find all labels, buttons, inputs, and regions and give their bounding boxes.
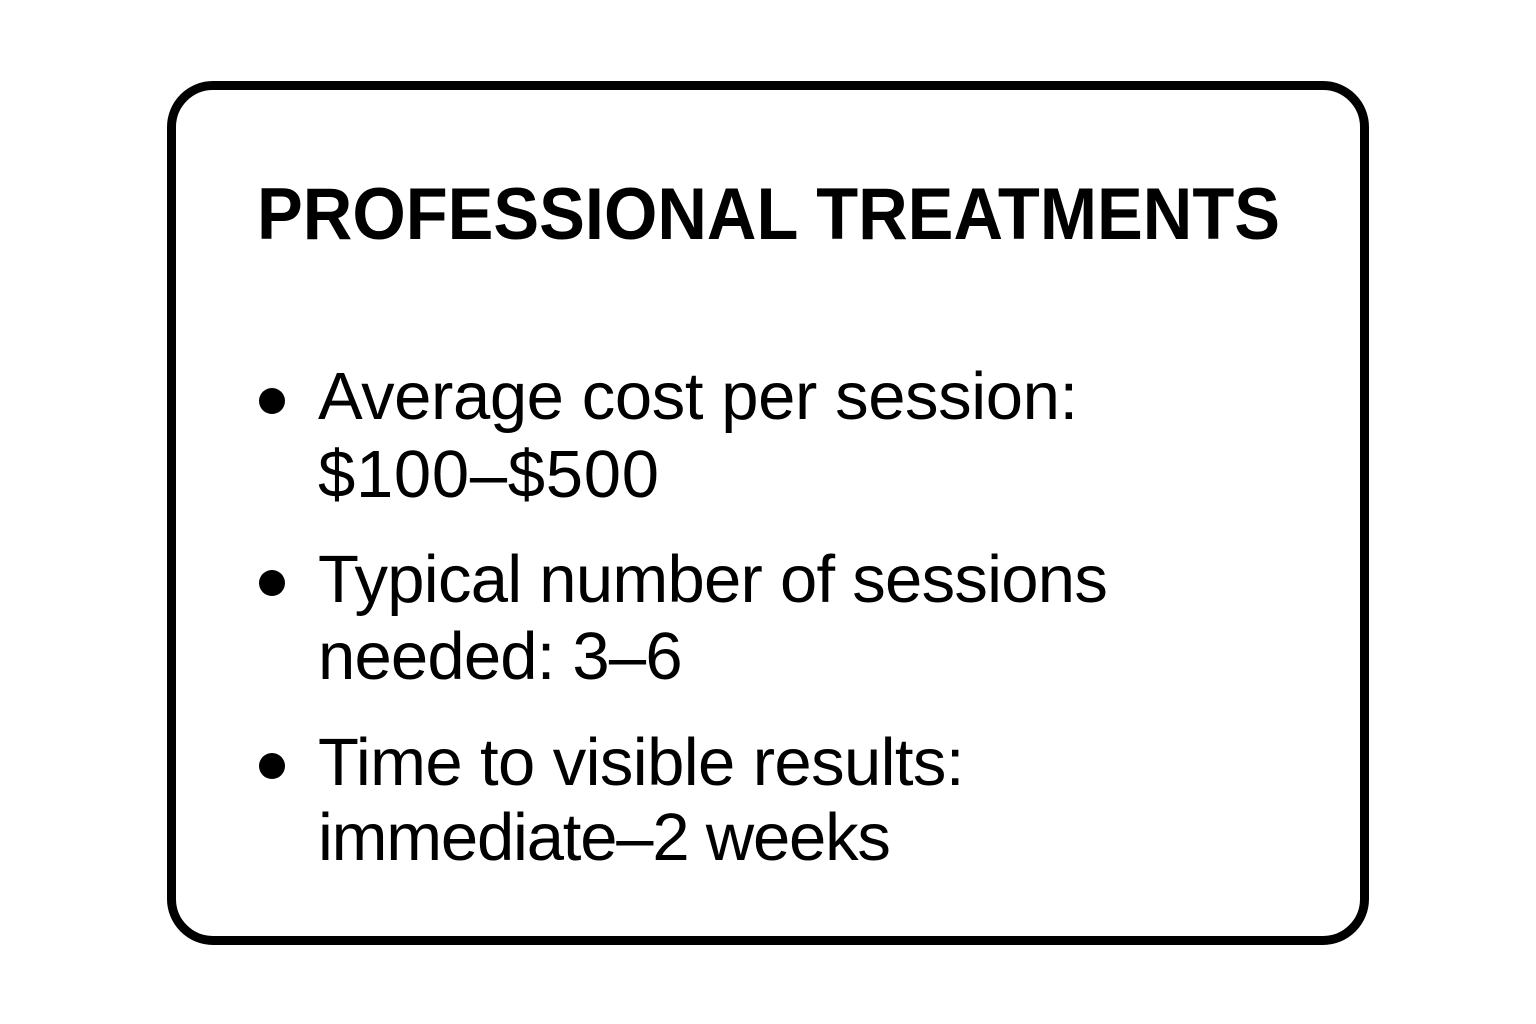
bullet dot 3	[259, 753, 285, 779]
line: cost value: $100–$500	[318, 437, 660, 512]
heading: PROFESSIONAL TREATMENTS	[257, 174, 1280, 255]
bullet 1 text	[259, 359, 1078, 512]
line: sessions label: Typical number of sessions	[318, 542, 1107, 617]
panel: professional treatments card	[167, 81, 1369, 945]
bullet 2 text	[259, 542, 1107, 694]
bullet dot 1	[259, 388, 285, 414]
line: sessions value: needed: 3–6	[318, 619, 682, 694]
bullet 3 text	[259, 725, 964, 875]
line: cost label: Average cost per session:	[318, 359, 1078, 434]
line: results value: immediate–2 weeks	[318, 800, 890, 875]
bullet dot 2	[259, 570, 285, 596]
line: results label: Time to visible results:	[318, 725, 964, 800]
